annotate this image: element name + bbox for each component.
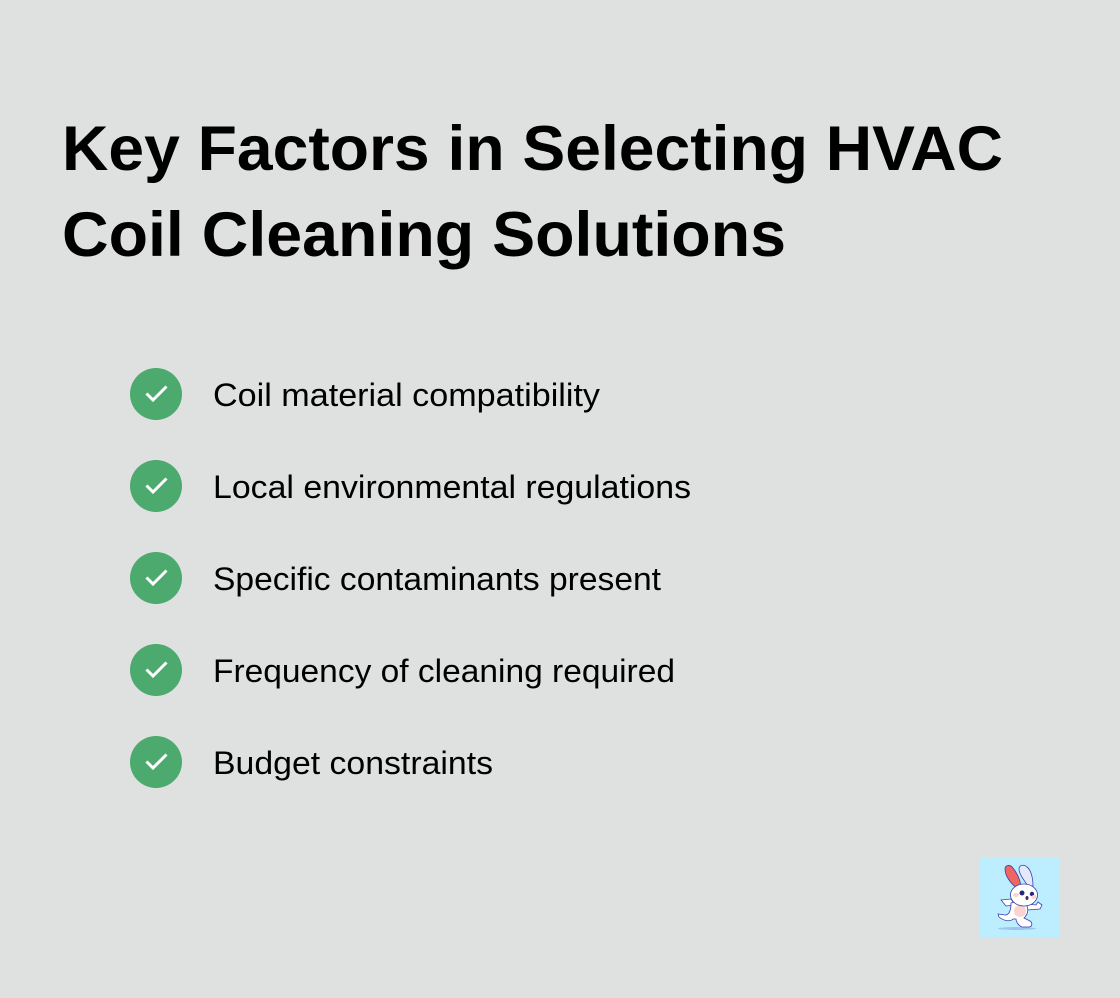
item: budget constraints: Budget constraints [213, 745, 493, 781]
head [1010, 884, 1038, 906]
title: Key Factors in Selecting HVAC [62, 114, 1003, 184]
item: coil material compatibility: Coil material compatibility [213, 377, 601, 413]
item: frequency of cleaning required [130, 644, 675, 696]
ears [1005, 865, 1021, 888]
limbs and body [1001, 899, 1015, 906]
item: frequency of cleaning required: Frequency of cleaning required [213, 653, 675, 689]
item: coil material compatibility [130, 368, 601, 420]
checklist [130, 368, 691, 788]
item: budget constraints [130, 736, 493, 788]
title [62, 114, 1003, 270]
title: Coil Cleaning Solutions [62, 200, 786, 270]
icon: running rabbit logo [980, 857, 1060, 937]
item: specific contaminants present: Specific contaminants present [213, 561, 661, 597]
item: specific contaminants present [130, 552, 661, 604]
item: local environmental regulations: Local environmental regulations [213, 469, 691, 505]
item: local environmental regulations [130, 460, 691, 512]
